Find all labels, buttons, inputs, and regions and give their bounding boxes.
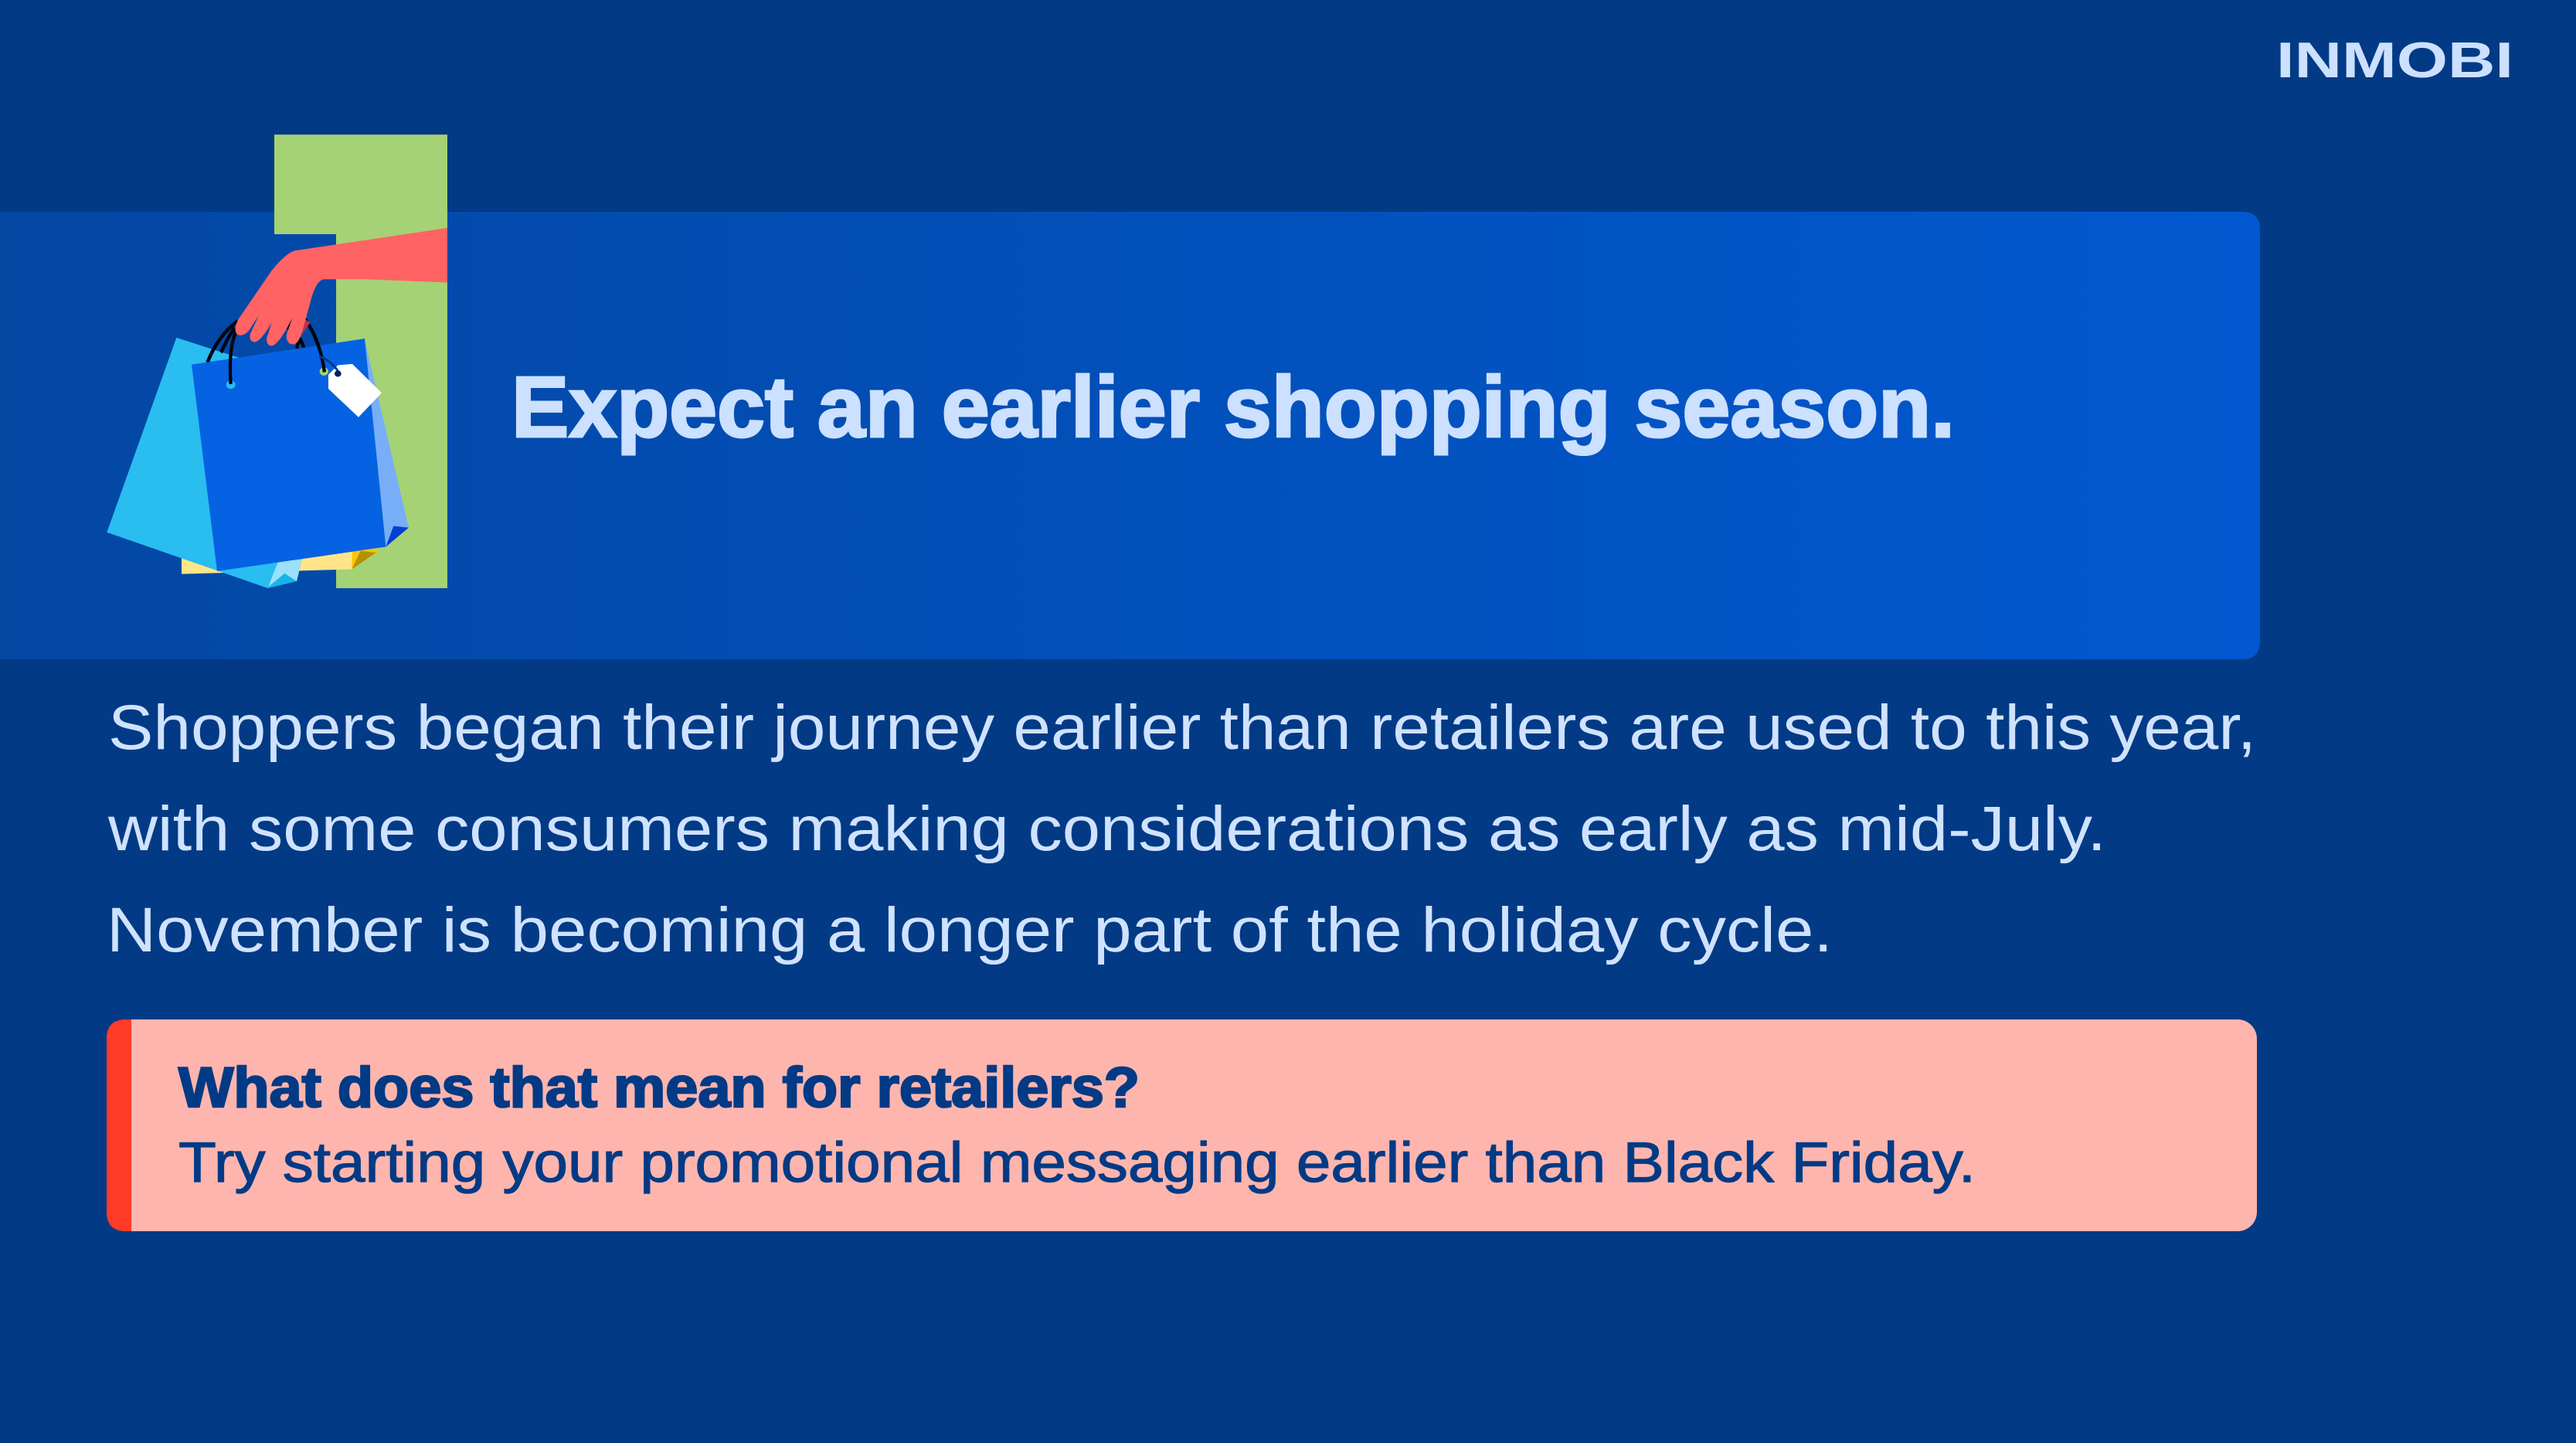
callout background [107, 1019, 2257, 1231]
front handles [230, 318, 325, 384]
hand and arm [236, 228, 447, 345]
callout question: What does that mean for retailers? [178, 1057, 1140, 1119]
callout red accent [107, 1019, 131, 1231]
green block [274, 134, 447, 588]
body line 1: Shoppers began their journey earlier than retailers are used to this year, [108, 693, 2256, 763]
front blue bag [192, 339, 386, 571]
callout: what it means for retailers [107, 1019, 2257, 1231]
panel: headline banner [0, 212, 2260, 659]
bag eyelets [226, 367, 328, 389]
heading: Expect an earlier shopping season. [511, 359, 1955, 455]
cyan bag [107, 338, 302, 588]
illustration: hand holding shopping bags [107, 134, 447, 588]
back handles [207, 321, 304, 362]
price tag [319, 356, 382, 417]
light blue bag side [365, 339, 409, 547]
body line 3: November is becoming a longer part of the holiday cycle. [107, 895, 1833, 965]
body line 2: with some consumers making considerations as early as mid-July. [107, 794, 2106, 864]
finger shadow [295, 319, 311, 337]
callout advice: Try starting your promotional messaging earlier than Black Friday. [178, 1132, 1976, 1194]
yellow bag [182, 548, 376, 574]
body text [107, 693, 2256, 965]
logo: InMobi: INMOBI [2276, 32, 2513, 88]
